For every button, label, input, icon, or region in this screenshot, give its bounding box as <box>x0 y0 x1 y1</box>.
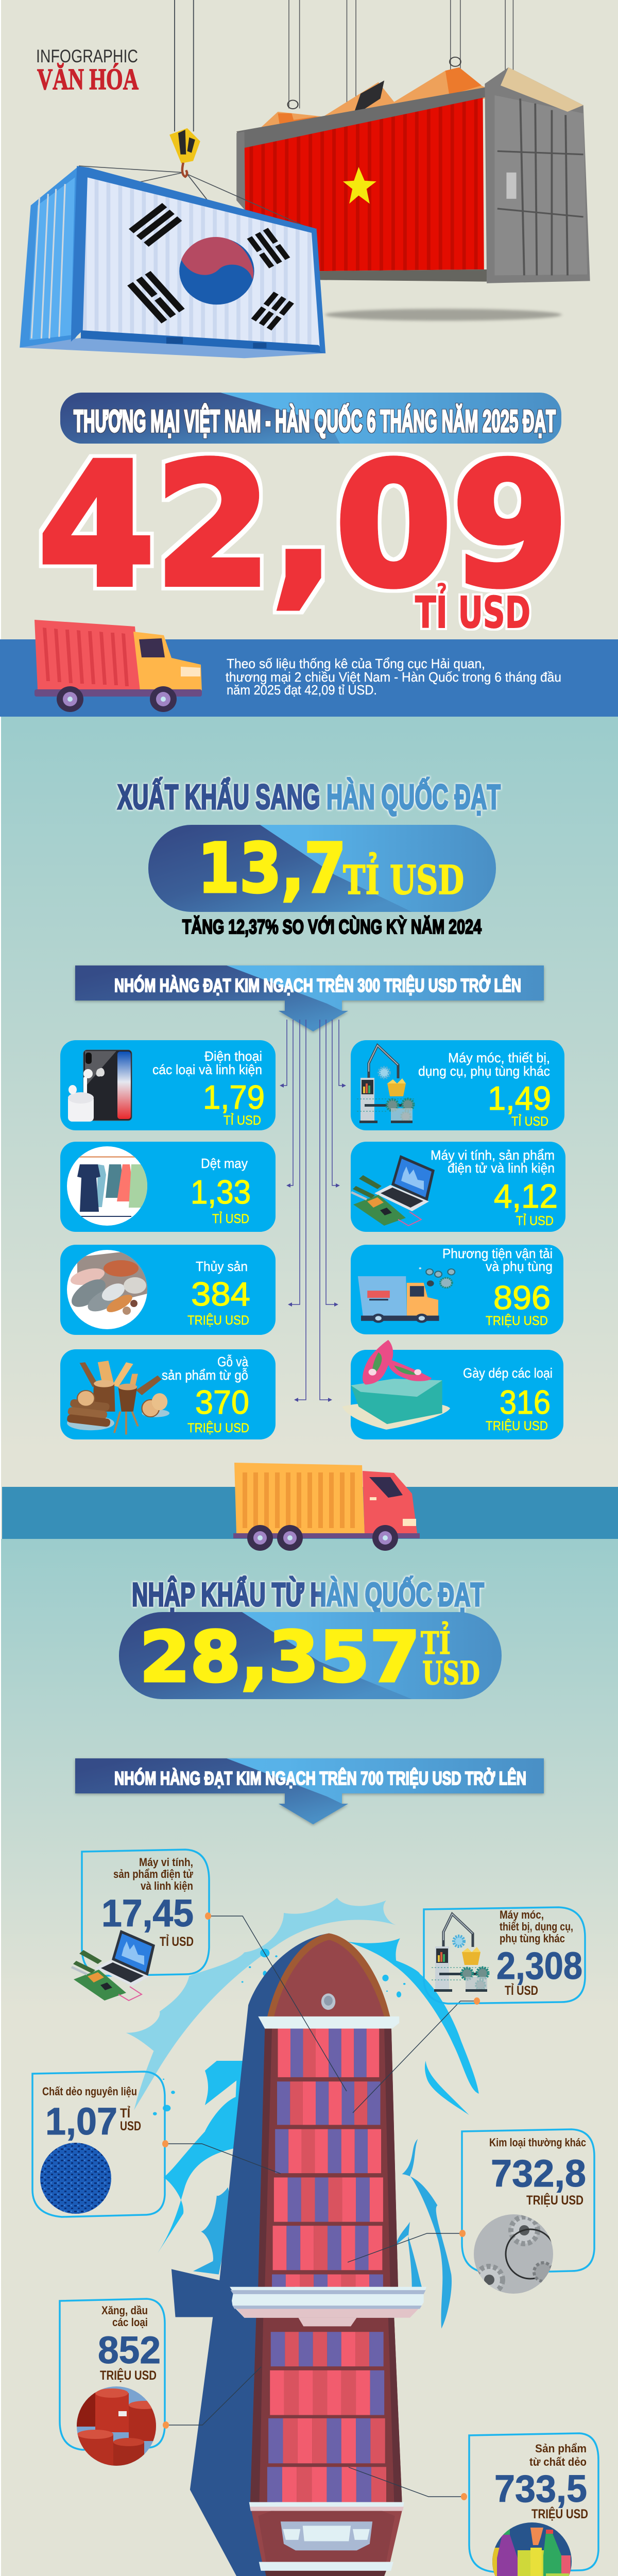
callout: machinery: TỈ USD <box>505 1982 538 1998</box>
card: machinery: Máy móc, thiết bị, <box>448 1050 550 1065</box>
title pill <box>60 393 561 444</box>
photo: plastic granules <box>40 2143 111 2214</box>
callout: metals: 732,8 <box>491 2152 586 2195</box>
card: phones <box>60 1040 276 1130</box>
illustration: container ship with splash <box>126 1898 479 2576</box>
card: textiles: TỈ USD <box>212 1211 249 1226</box>
callout: computers: TỈ USD <box>160 1934 194 1949</box>
callout: computers: sản phẩm điện tử <box>113 1868 193 1880</box>
callout: plastic products: từ chất dẻo <box>529 2455 587 2468</box>
card: seafood: 384 <box>191 1275 250 1313</box>
intro text: thương mại 2 chiều Việt Nam - Hàn Quốc trong 6 tháng đầu <box>226 669 561 685</box>
icon: delivery truck <box>358 1267 455 1323</box>
callout: metals: TRIỆU USD <box>526 2192 583 2208</box>
callout: computers: và linh kiện <box>141 1879 193 1892</box>
callout: computers: Máy vi tính, <box>139 1856 193 1869</box>
card: vehicles: 896 <box>493 1279 551 1316</box>
callout: plastics: 1,07 <box>45 2100 117 2143</box>
icon: seafood <box>67 1249 149 1329</box>
callout: petroleum: các loại <box>112 2316 148 2329</box>
callout: petroleum: TRIỆU USD <box>100 2367 157 2383</box>
card: machinery: dụng cụ, phụ tùng khác <box>418 1063 550 1079</box>
growth note: TĂNG 12,37% SO VỚI CÙNG KỲ NĂM 2024 <box>182 916 482 938</box>
callout: machinery: 2,308 <box>496 1944 582 1987</box>
icon: laptop <box>71 1930 155 2001</box>
card: footwear: TRIỆU USD <box>486 1418 548 1433</box>
illustration: Vietnam container (red) <box>236 0 590 320</box>
icon: red truck <box>35 620 202 712</box>
card: wood: TRIỆU USD <box>187 1420 249 1435</box>
callout: metals: Kim loại thường khác <box>489 2136 586 2149</box>
card: machinery: 1,49 <box>488 1079 551 1117</box>
callout: plastics: TỈ <box>120 2105 130 2121</box>
band with orange truck <box>2 1463 618 1551</box>
icon: clothes rack <box>67 1146 149 1226</box>
intro text: năm 2025 đạt 42,09 tỉ USD. <box>227 682 377 698</box>
card: computers: điện tử và linh kiện <box>448 1160 555 1176</box>
pill: import value 28,357: TỈ <box>421 1621 451 1662</box>
callout: petroleum: 852 <box>98 2329 161 2371</box>
callout: machinery: Máy móc, <box>500 1908 544 1921</box>
card: textiles: 1,33 <box>191 1173 251 1211</box>
card: phones: các loại và linh kiện <box>152 1062 262 1077</box>
card: computers: TỈ USD <box>516 1213 554 1228</box>
ship bow <box>267 1934 390 2017</box>
callout: plastic products: TRIỆU USD <box>531 2506 588 2521</box>
card: vehicles: và phụ tùng <box>486 1259 553 1274</box>
callout: plastic products: 733,5 <box>494 2467 587 2510</box>
icon: machine <box>432 1914 489 1992</box>
callout: plastics: Chất dẻo nguyên liệu <box>42 2085 137 2098</box>
big number 42,09: 42,09 <box>38 428 569 624</box>
card: phones: Điện thoại <box>204 1048 262 1064</box>
icon: machine <box>357 1045 415 1123</box>
card: textiles: Dệt may <box>201 1156 248 1171</box>
intro band <box>0 639 618 717</box>
card: seafood: Thủy sản <box>196 1259 248 1274</box>
logo: Infographic Văn Hóa: VĂN HÓA <box>37 62 139 96</box>
card: vehicles: TRIỆU USD <box>486 1313 548 1328</box>
card: seafood <box>60 1245 276 1335</box>
pill: export value 13,7: TỈ USD <box>343 852 464 904</box>
callout: machinery <box>424 1907 585 2005</box>
card: footwear: Gày dép các loại <box>463 1365 553 1381</box>
ship deck and stern <box>230 2287 426 2576</box>
callout: computers: 17,45 <box>101 1892 194 1935</box>
water splash <box>126 1898 479 2576</box>
card: computers: Máy vi tính, sản phẩm <box>431 1147 555 1163</box>
intro text <box>226 656 561 698</box>
callout: machinery: phụ tùng khác <box>500 1932 565 1945</box>
unit: tỉ USD: TỈ USD <box>415 583 530 638</box>
ship shadow <box>171 1934 329 2576</box>
card: computers: 4,12 <box>494 1177 558 1215</box>
pill: import value 28,357: 28,357 <box>140 1617 420 1698</box>
pill: import value 28,357: USD <box>422 1654 480 1692</box>
intro text: Theo số liệu thống kê của Tổng cục Hải quan, <box>227 656 485 671</box>
connector arrows <box>280 1020 346 1402</box>
card: machinery: TỈ USD <box>511 1113 548 1129</box>
card: wood <box>60 1349 276 1439</box>
card: wood: sản phẩm từ gỗ <box>162 1367 248 1383</box>
containers <box>267 2028 386 2502</box>
icon: phone and earbuds <box>68 1050 132 1122</box>
photo: oil barrels <box>77 2386 156 2466</box>
logo: Infographic Văn Hóa: INFOGRAPHIC <box>36 46 138 66</box>
icon: logs <box>66 1361 169 1434</box>
pill: export value 13,7 <box>148 825 496 912</box>
card: machinery <box>351 1040 564 1130</box>
callout: petroleum <box>60 2299 169 2473</box>
ship hull <box>250 2016 402 2502</box>
banner: import groups <box>75 1758 544 1824</box>
card: phones: 1,79 <box>203 1078 265 1116</box>
pill: import value 28,357 <box>119 1612 502 1699</box>
banner: export groups <box>75 965 544 1031</box>
callout: plastics: USD <box>120 2119 141 2133</box>
card: vehicles: Phương tiện vận tải <box>442 1246 553 1261</box>
icon: laptop <box>351 1155 435 1226</box>
card: seafood: TRIỆU USD <box>187 1313 249 1328</box>
card: computers <box>351 1142 565 1232</box>
photo: cleaning products <box>492 2522 572 2576</box>
card: wood: Gỗ và <box>217 1354 248 1369</box>
illustration: Korea container (flag) <box>20 0 327 358</box>
pill: export value 13,7: 13,7 <box>198 829 346 908</box>
callout: plastic products <box>461 2433 598 2576</box>
card: phones: TỈ USD <box>224 1112 261 1128</box>
card: footwear <box>342 1340 563 1439</box>
leader lines <box>165 1916 477 2497</box>
card: vehicles <box>351 1245 563 1334</box>
callout: petroleum: Xăng, dầu <box>101 2304 148 2317</box>
photo: gears <box>474 2214 555 2294</box>
card: textiles <box>60 1142 276 1232</box>
callout: computers <box>71 1850 211 2001</box>
callout: plastics <box>32 2072 168 2217</box>
icon: shoes on box <box>342 1340 450 1430</box>
callout: metals <box>459 2129 594 2294</box>
card: wood: 370 <box>195 1383 249 1421</box>
callout: machinery: thiết bị, dụng cụ, <box>500 1920 573 1933</box>
card: footwear: 316 <box>500 1383 551 1421</box>
logo: Infographic Văn Hóa <box>36 46 139 96</box>
callout: plastic products: Sản phẩm <box>535 2442 587 2455</box>
